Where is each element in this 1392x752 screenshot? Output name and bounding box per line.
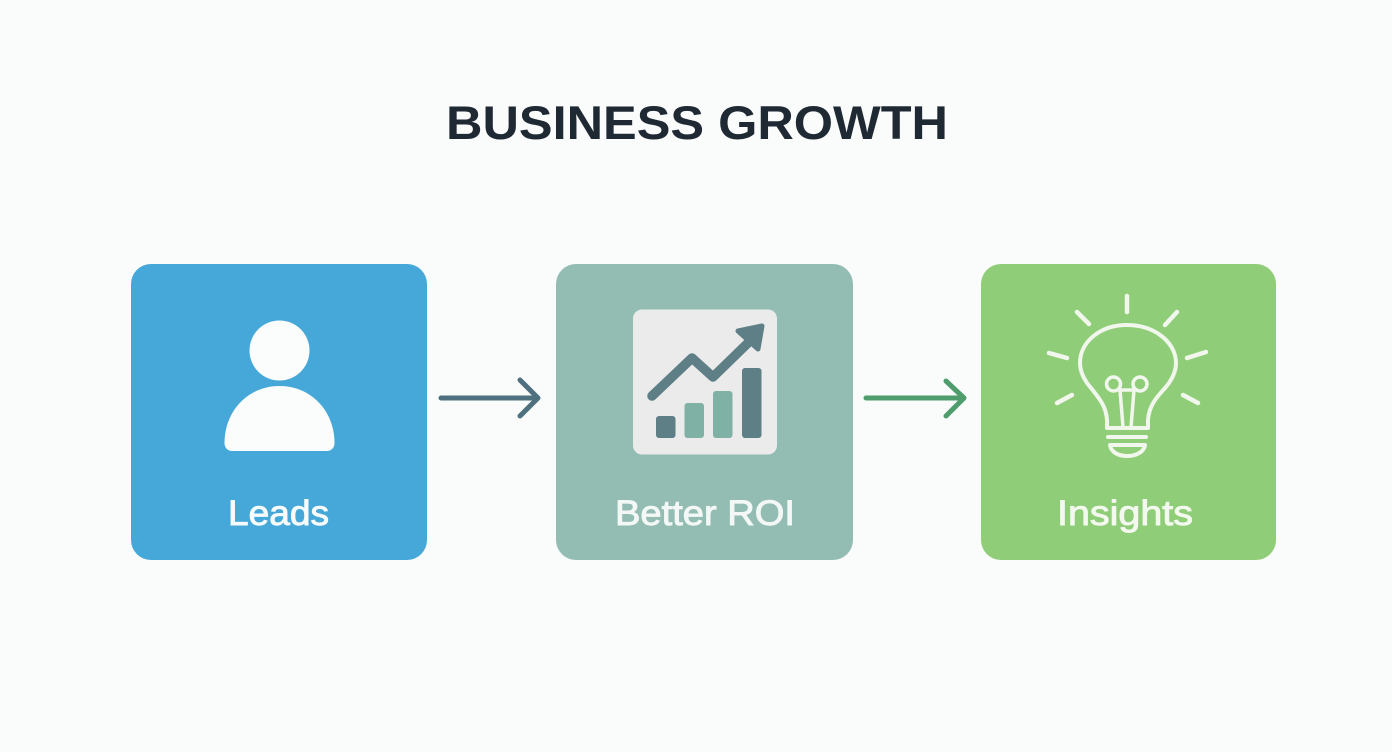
icon: growth chart <box>633 310 777 454</box>
rays <box>1049 296 1206 403</box>
label: insights: Insights <box>1057 494 1193 533</box>
panel: insights <box>981 264 1276 560</box>
panel: better roi <box>556 264 853 560</box>
icon: person <box>224 320 334 451</box>
bulb outline <box>1080 325 1176 428</box>
icon: light bulb <box>1049 296 1206 456</box>
panel: leads <box>131 264 427 560</box>
label: better roi: Better ROI <box>615 494 795 533</box>
bulb base <box>1108 437 1146 456</box>
trend arrow <box>652 326 762 396</box>
filament <box>1106 377 1147 427</box>
arrow: leads to better roi <box>441 380 538 416</box>
bars <box>656 368 762 438</box>
title: BUSINESS GROWTH <box>446 96 948 149</box>
label: leads: Leads <box>228 494 329 533</box>
arrow: better roi to insights <box>866 381 964 416</box>
